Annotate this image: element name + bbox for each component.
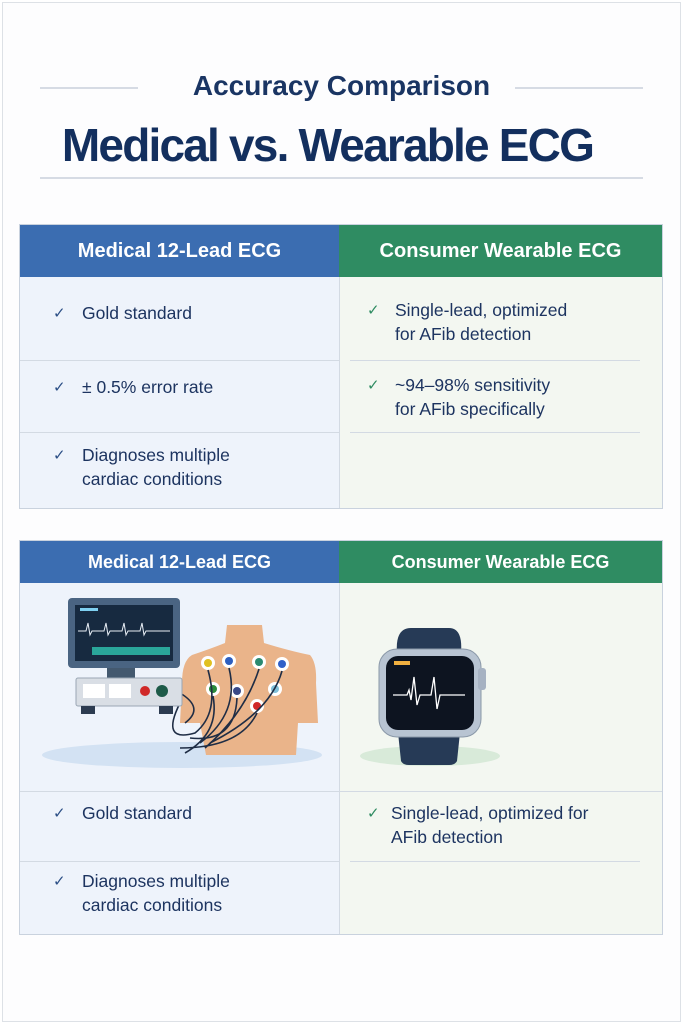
item: single-lead: AFib detection [391, 827, 503, 847]
illustration: medical ECG machine and torso [42, 598, 322, 768]
item: single-lead: ✓ [367, 302, 380, 319]
header: medical: Medical 12-Lead ECG [88, 552, 271, 572]
header: wearable: Consumer Wearable ECG [392, 552, 609, 572]
item: gold standard: ✓ [53, 305, 66, 322]
item: single-lead [367, 803, 588, 847]
torso [180, 625, 318, 755]
item: diagnoses: cardiac conditions [82, 469, 222, 489]
item: diagnoses: ✓ [53, 873, 66, 890]
monitor [68, 598, 180, 668]
header: wearable: Consumer Wearable ECG [380, 240, 621, 262]
item: gold standard: Gold standard [82, 303, 192, 323]
item: diagnoses: Diagnoses multiple [82, 445, 230, 465]
item: single-lead: Single-lead, optimized [395, 300, 567, 320]
item: gold standard: Gold standard [82, 803, 192, 823]
item: sensitivity [367, 375, 550, 419]
item: single-lead: Single-lead, optimized for [391, 803, 588, 823]
header: medical: Medical 12-Lead ECG [78, 240, 281, 262]
item: diagnoses: cardiac conditions [82, 895, 222, 915]
item: single-lead [367, 300, 567, 344]
item: diagnoses [53, 445, 230, 489]
header: medical [20, 541, 339, 583]
item: single-lead: for AFib detection [395, 324, 531, 344]
header: wearable [339, 225, 662, 277]
item: diagnoses: Diagnoses multiple [82, 871, 230, 891]
item: sensitivity: ✓ [367, 377, 380, 394]
panel: comparison table 1 [19, 224, 663, 509]
item: diagnoses [53, 871, 230, 915]
item: sensitivity: for AFib specifically [395, 399, 545, 419]
item: diagnoses: ✓ [53, 447, 66, 464]
item: sensitivity: ~94–98% sensitivity [395, 375, 550, 395]
item: single-lead: ✓ [367, 805, 380, 822]
item: error rate: ± 0.5% error rate [82, 377, 213, 397]
subtitle: Accuracy Comparison [193, 70, 490, 101]
title: Medical vs. Wearable ECG [62, 119, 593, 171]
illustration: smartwatch [360, 628, 500, 766]
item: gold standard: ✓ [53, 805, 66, 822]
header: medical [20, 225, 339, 277]
item: error rate: ✓ [53, 379, 66, 396]
header: wearable [339, 541, 662, 583]
panel: comparison table 2 [19, 540, 663, 935]
